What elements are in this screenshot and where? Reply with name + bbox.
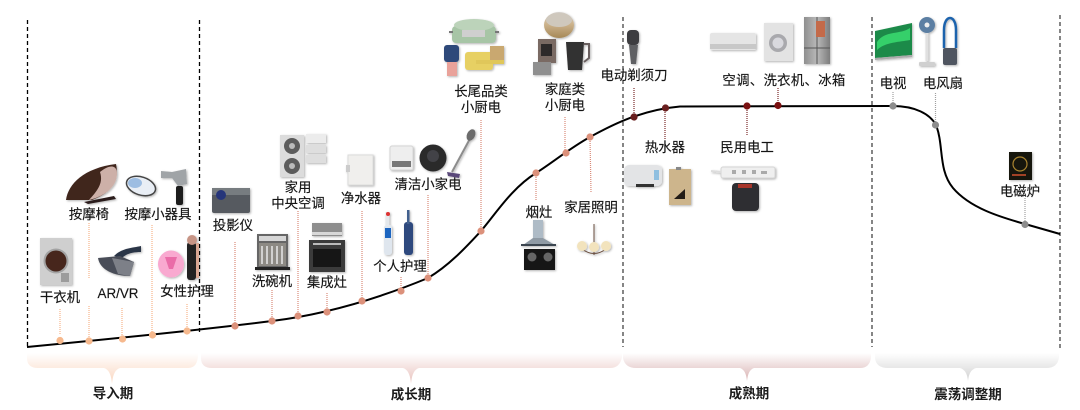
icon: dishwasher — [255, 234, 290, 270]
band: 成熟期 — [623, 353, 871, 381]
marker: 干衣机 — [56, 309, 64, 344]
icon: stick vacuum — [447, 128, 477, 178]
icon: gas hob — [524, 249, 555, 270]
icon: yellow toaster — [465, 46, 504, 70]
label: 家用中央空调: 家用 — [285, 180, 311, 195]
icon: standing fan — [919, 17, 935, 66]
band: 成长期 — [201, 353, 622, 384]
marker: 电动剃须刀 — [630, 88, 638, 121]
label: 烟灶: 烟灶 — [526, 205, 552, 220]
marker: AR/VR — [119, 308, 126, 343]
icon: chandelier — [577, 224, 611, 255]
icon: massage chair — [66, 164, 117, 204]
marker: 长尾品类小厨电 — [477, 120, 485, 235]
label: 电磁炉: 电磁炉 — [1000, 184, 1040, 199]
marker: 民用电工 — [743, 102, 751, 135]
marker: 家居照明 — [586, 133, 594, 193]
icon: television — [875, 23, 912, 60]
label: 电动剃须刀: 电动剃须刀 — [601, 68, 667, 83]
icon: range hood — [521, 220, 556, 246]
label: 家居照明: 家居照明 — [564, 199, 618, 215]
band: 震荡调整期 — [875, 353, 1059, 381]
icon: mopping robot — [390, 146, 413, 170]
label: 热水器: 热水器 — [645, 140, 686, 155]
icon: electric toothbrush — [384, 212, 392, 255]
marker: 按摩椅 — [85, 223, 93, 345]
marker: 清洁小家电 — [424, 195, 432, 282]
icon: juice blender — [444, 45, 459, 76]
icon: water purifier — [346, 155, 373, 185]
marker: 电风扇 — [932, 93, 939, 129]
band: 导入期 — [27, 353, 198, 384]
icon: kettle — [566, 42, 589, 70]
icon: travel adapter — [732, 183, 759, 211]
marker: 按摩小器具 — [149, 225, 156, 339]
stage label: 成长期: 成长期 — [391, 386, 431, 402]
icon: power strip — [711, 167, 775, 178]
stage label: 成熟期: 成熟期 — [729, 385, 769, 401]
label: 按摩小器具: 按摩小器具 — [125, 206, 191, 222]
label: 洗碗机: 洗碗机 — [252, 274, 293, 289]
marker: 烟灶 — [532, 169, 540, 200]
marker: 空调洗衣机冰箱 — [774, 88, 782, 109]
marker: 家庭类小厨电 — [562, 117, 570, 157]
label: 电风扇: 电风扇 — [923, 76, 963, 91]
icon: integrated stove — [309, 223, 345, 272]
stage label: 震荡调整期: 震荡调整期 — [934, 386, 1002, 402]
icon: storage water heater — [624, 165, 662, 187]
icon: dryer — [40, 238, 72, 285]
marker: 投影仪 — [231, 242, 239, 330]
marker: 电视 — [889, 92, 897, 110]
icon: induction cooker — [1009, 152, 1032, 180]
icon: electric shaver — [627, 30, 639, 64]
life cycle curve — [27, 106, 1060, 347]
marker: 净水器 — [358, 211, 366, 305]
icon: rice cooker — [544, 12, 574, 38]
marker: 个人护理 — [397, 277, 405, 295]
product icons — [40, 12, 1032, 285]
icon: beauty wand — [187, 235, 199, 280]
label: 空调、洗衣机、冰箱: 空调、洗衣机、冰箱 — [722, 73, 846, 88]
label: 投影仪: 投影仪 — [213, 218, 253, 233]
label: 按摩椅: 按摩椅 — [69, 206, 109, 222]
label: 家用中央空调: 中央空调 — [271, 196, 325, 211]
label: 电视: 电视 — [880, 76, 906, 91]
icon: bladeless fan — [943, 18, 957, 65]
label: 清洁小家电: 清洁小家电 — [395, 176, 461, 192]
label: 长尾品类小厨电: 长尾品类 — [454, 84, 508, 99]
label: 女性护理: 女性护理 — [160, 283, 214, 299]
icon: robot vacuum — [420, 144, 446, 172]
marker: 女性护理 — [183, 304, 191, 335]
icon: pink cleansing device — [158, 250, 184, 278]
label: AR/VR: AR/VR — [98, 286, 139, 301]
icon: green multi cooker — [449, 19, 499, 43]
icon: projector — [212, 188, 250, 213]
icon: gas water heater — [669, 167, 691, 205]
stage label: 导入期: 导入期 — [93, 386, 133, 401]
marker: 洗碗机 — [268, 290, 276, 325]
label: 长尾品类小厨电: 小厨电 — [461, 100, 501, 115]
marker: 热水器 — [662, 104, 669, 139]
label: 集成灶: 集成灶 — [307, 275, 347, 290]
icon: eye massager — [124, 173, 158, 199]
icon: split air conditioner — [710, 33, 756, 50]
icon: washing machine — [764, 23, 793, 61]
icon: VR headset — [98, 246, 141, 276]
icon: water flosser — [404, 210, 413, 255]
icon: central air conditioner — [280, 134, 326, 177]
icon: refrigerator — [804, 17, 830, 64]
label: 家庭类小厨电: 小厨电 — [545, 98, 585, 113]
label: 家庭类小厨电: 家庭类 — [545, 82, 585, 97]
label: 个人护理: 个人护理 — [373, 259, 427, 274]
label: 净水器: 净水器 — [341, 191, 382, 206]
label: 民用电工: 民用电工 — [720, 140, 774, 155]
marker: 集成灶 — [323, 293, 331, 316]
icon: massage gun — [161, 169, 187, 205]
marker: 电磁炉 — [1021, 198, 1029, 228]
marker: 家用中央空调 — [294, 211, 302, 320]
label: 干衣机: 干衣机 — [40, 290, 81, 305]
icon: soymilk machine — [533, 39, 556, 75]
